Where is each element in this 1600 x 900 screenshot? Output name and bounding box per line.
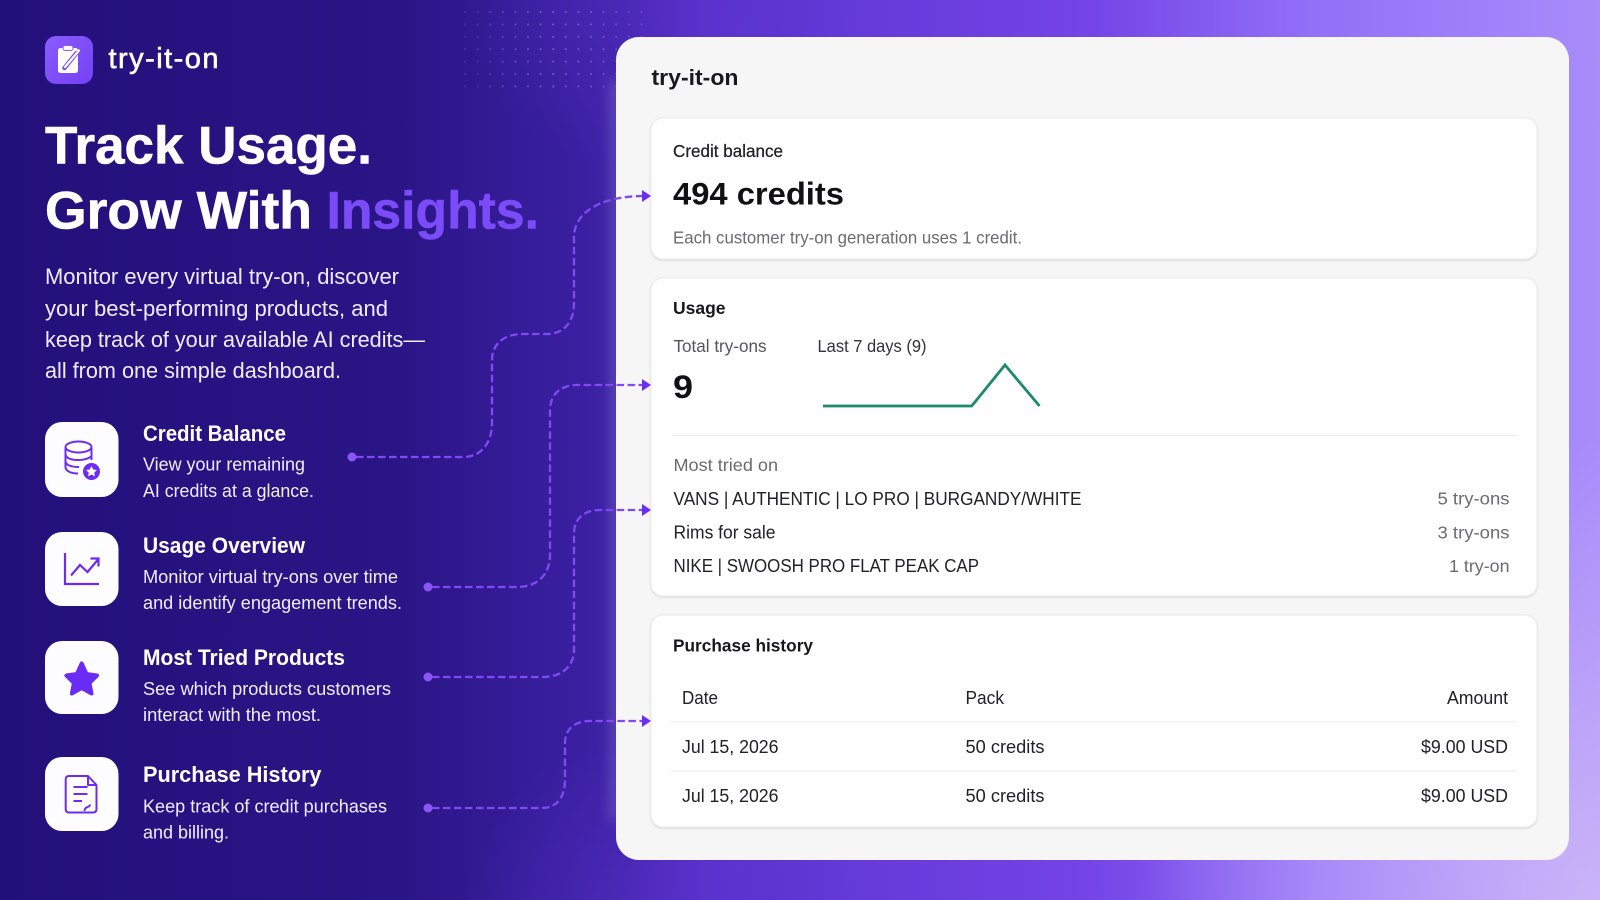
feature title: Usage Overview	[143, 533, 306, 558]
arrow: most tried connector	[424, 504, 651, 682]
most tried row 1	[674, 488, 1510, 509]
credit balance label: Credit balance	[673, 141, 783, 161]
feature description: See which products customers	[143, 678, 391, 699]
feature description	[143, 678, 391, 725]
table row 2: 50 credits	[966, 786, 1044, 806]
icon: line chart	[45, 532, 118, 606]
arrow: credit balance connector	[348, 190, 651, 462]
feature description: View your remaining	[143, 454, 305, 474]
brand name: try-it-on	[108, 43, 218, 75]
feature: credit balance	[45, 421, 314, 501]
feature: purchase history	[45, 757, 387, 842]
most tried row 1: 5 try-ons	[1438, 488, 1510, 508]
sparkline label: Last 7 days (9)	[818, 336, 926, 356]
headline: Insights.	[326, 182, 539, 240]
icon: star	[45, 641, 118, 714]
feature description: Monitor virtual try-ons over time	[143, 566, 398, 587]
most tried row 2: 3 try-ons	[1438, 522, 1510, 542]
table row 1: $9.00 USD	[1421, 737, 1508, 757]
table header: Pack	[966, 688, 1005, 708]
table header: Amount	[1447, 688, 1508, 708]
table row 2: Jul 15, 2026	[682, 786, 778, 806]
card: credit balance	[651, 118, 1537, 259]
credit balance value: 494 credits	[673, 176, 844, 212]
card: usage	[651, 278, 1537, 596]
feature description	[143, 454, 314, 501]
feature description: Keep track of credit purchases	[143, 796, 387, 816]
panel: dashboard window	[611, 37, 1569, 860]
feature title: Purchase History	[143, 762, 322, 787]
intro paragraph: keep track of your available AI credits—	[45, 327, 425, 352]
headline: Track Usage.	[45, 116, 372, 176]
feature: usage overview	[45, 532, 402, 613]
most tried heading: Most tried on	[674, 455, 778, 475]
usage heading: Usage	[673, 298, 726, 318]
most tried row 2	[674, 522, 1510, 542]
table row 2: $9.00 USD	[1421, 786, 1508, 806]
feature description: interact with the most.	[143, 704, 321, 725]
most tried row 1: VANS | AUTHENTIC | LO PRO | BURGANDY/WHITE	[674, 489, 1082, 509]
arrow: purchase history connector	[424, 715, 651, 812]
feature: most tried products	[45, 641, 391, 725]
icon: document	[45, 757, 118, 831]
most tried row 3	[674, 556, 1510, 576]
table header: Date	[682, 688, 718, 708]
dashboard title: try-it-on	[652, 65, 738, 90]
headline: Grow With	[45, 182, 312, 240]
feature description: and identify engagement trends.	[143, 592, 402, 613]
feature description	[143, 796, 387, 842]
total try-ons label: Total try-ons	[674, 336, 767, 356]
feature description	[143, 566, 402, 613]
table row 1: 50 credits	[966, 737, 1044, 757]
feature description: AI credits at a glance.	[143, 480, 314, 501]
total try-ons value: 9	[673, 369, 693, 405]
table header	[682, 688, 1508, 708]
table row 1	[682, 737, 1508, 757]
credit balance note: Each customer try-on generation uses 1 credit.	[673, 228, 1022, 248]
intro paragraph: Monitor every virtual try-on, discover	[45, 264, 399, 289]
intro paragraph: all from one simple dashboard.	[45, 358, 341, 383]
sparkline chart	[823, 365, 1040, 406]
intro paragraph: your best-performing products, and	[45, 296, 388, 321]
purchase history heading: Purchase history	[673, 636, 813, 656]
icon: database with star	[45, 422, 118, 497]
most tried row 3: NIKE | SWOOSH PRO FLAT PEAK CAP	[674, 556, 979, 576]
feature title: Credit Balance	[143, 421, 286, 446]
most tried row 2: Rims for sale	[674, 522, 776, 542]
arrow: usage overview connector	[424, 379, 651, 592]
most tried row 3: 1 try-on	[1449, 556, 1510, 576]
headline	[45, 116, 539, 240]
card: purchase history	[651, 615, 1537, 827]
logo	[45, 36, 218, 84]
feature title: Most Tried Products	[143, 645, 345, 670]
feature description: and billing.	[143, 822, 229, 842]
intro paragraph	[45, 264, 425, 383]
table row 1: Jul 15, 2026	[682, 737, 778, 757]
table row 2	[682, 786, 1508, 806]
